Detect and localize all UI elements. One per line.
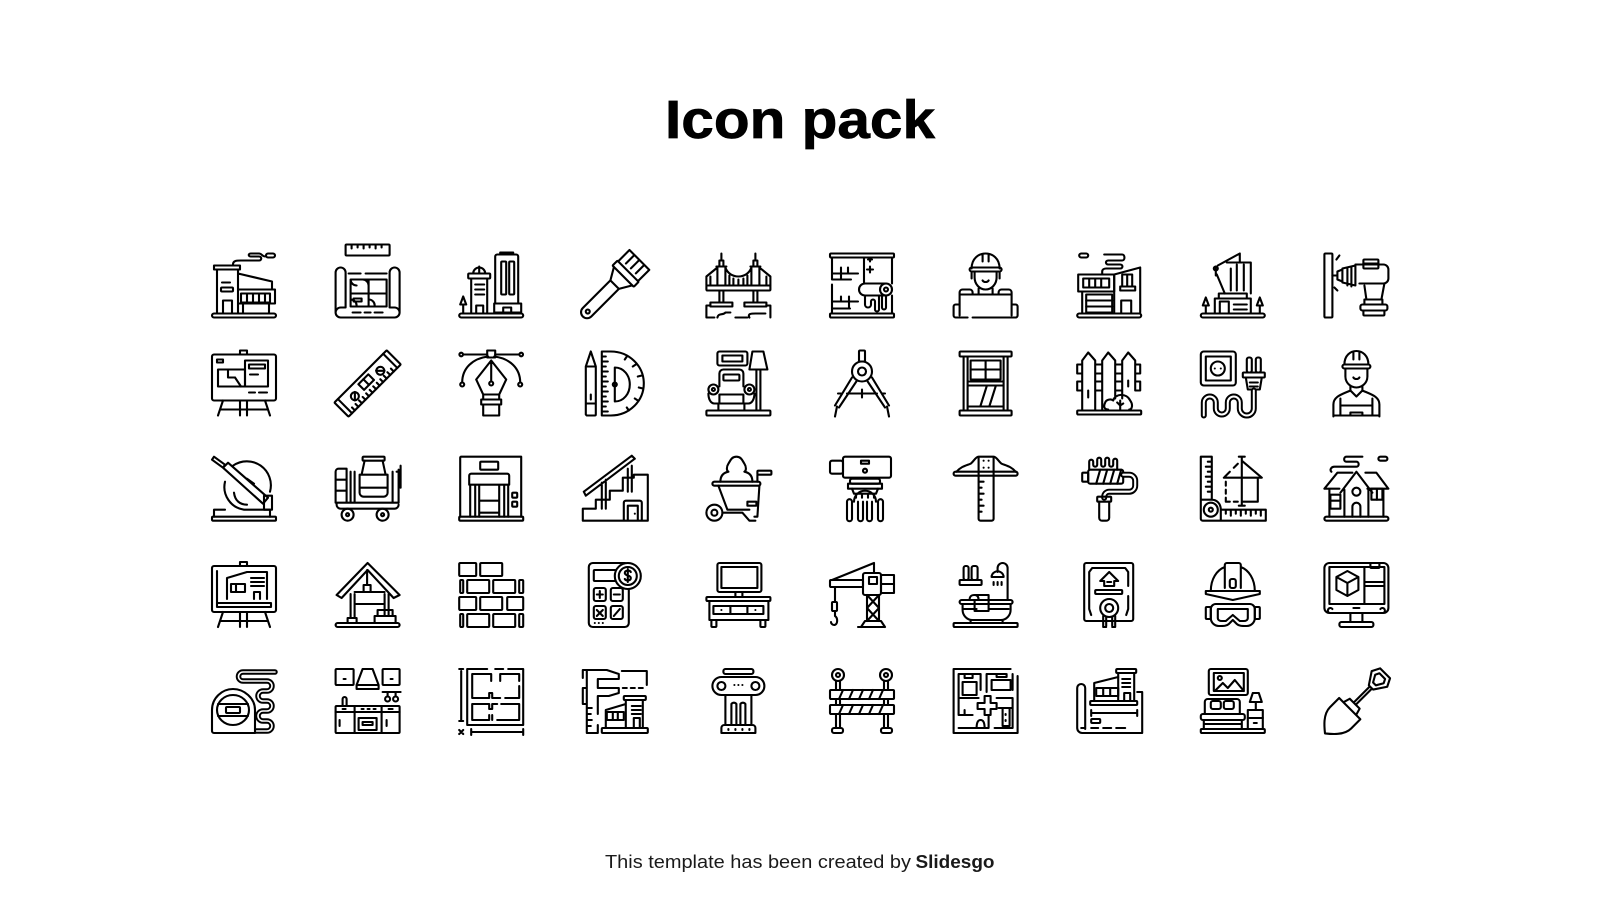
icon: T-square: [954, 457, 1018, 521]
icon: paint brush: [572, 249, 650, 327]
icon: house certificate: [1084, 563, 1133, 627]
icon: easel with building drawing: [212, 562, 276, 627]
icon: tape measure: [212, 672, 275, 733]
icon: L-ruler and house plan: [1201, 457, 1266, 521]
icon: circular saw: [212, 457, 276, 521]
icon: suburban house: [1324, 457, 1388, 521]
icon: wheelbarrow: [706, 457, 771, 521]
icon: modern house with smoke: [1077, 254, 1141, 318]
icon: factory with smoke: [212, 254, 276, 318]
icon: pen tool: [459, 350, 523, 416]
icon: office tower with crane roof: [1201, 254, 1265, 318]
icon: blueprint with building: [1077, 669, 1142, 733]
icon: furnished floor plan: [954, 669, 1018, 733]
icon: drawing compass: [835, 350, 889, 416]
footer credit: Slidesgo: [916, 851, 994, 872]
title: Icon pack: [665, 90, 936, 150]
icon: bedroom: [1201, 669, 1265, 733]
icon: socket and plug: [1201, 352, 1265, 416]
icon: spirit level: [334, 350, 401, 417]
icon: worker holding blueprint: [954, 254, 1018, 318]
icon: calculator with coin: [589, 563, 641, 627]
footer credit: This template has been created by: [605, 851, 912, 872]
icon: surveying level on tripod: [830, 457, 891, 521]
icon: elevator: [459, 457, 523, 521]
icon: kitchen: [336, 669, 401, 733]
icon: hard hat and goggles: [1206, 563, 1260, 626]
icon: picket fence with bush: [1077, 352, 1141, 414]
icon: tower crane: [830, 563, 894, 627]
icon: shovel: [1314, 663, 1396, 744]
icon: paint roller: [1082, 458, 1135, 521]
icon: wooden roof frame: [336, 563, 400, 627]
icon: staircase: [583, 456, 648, 521]
icon: ionic column: [712, 669, 764, 733]
icon: caliper with building: [583, 670, 648, 733]
icon: monitor with 3D cube: [1324, 563, 1388, 627]
icon: city buildings: [459, 252, 523, 318]
icon: armchair and lamp: [706, 352, 770, 416]
icon: empty floor plan with dimensions: [459, 669, 523, 735]
icon: bathtub and shower: [954, 563, 1018, 627]
icon: window frame: [960, 352, 1012, 416]
icon: cement mixer: [336, 457, 401, 521]
icon: easel with floor plan: [212, 350, 276, 416]
icon: blueprint with ruler: [336, 244, 400, 318]
icon: worker bust: [1333, 351, 1379, 416]
icon grid: [212, 244, 1396, 744]
icon: suspension bridge: [706, 254, 770, 318]
icon: wallpaper roll: [830, 254, 894, 318]
icon: TV on console: [706, 563, 770, 627]
icon: brick wall: [459, 563, 523, 627]
icon: road barrier: [830, 669, 894, 733]
icon: power drill: [1324, 254, 1388, 318]
icon: pencil and protractor: [586, 352, 644, 416]
